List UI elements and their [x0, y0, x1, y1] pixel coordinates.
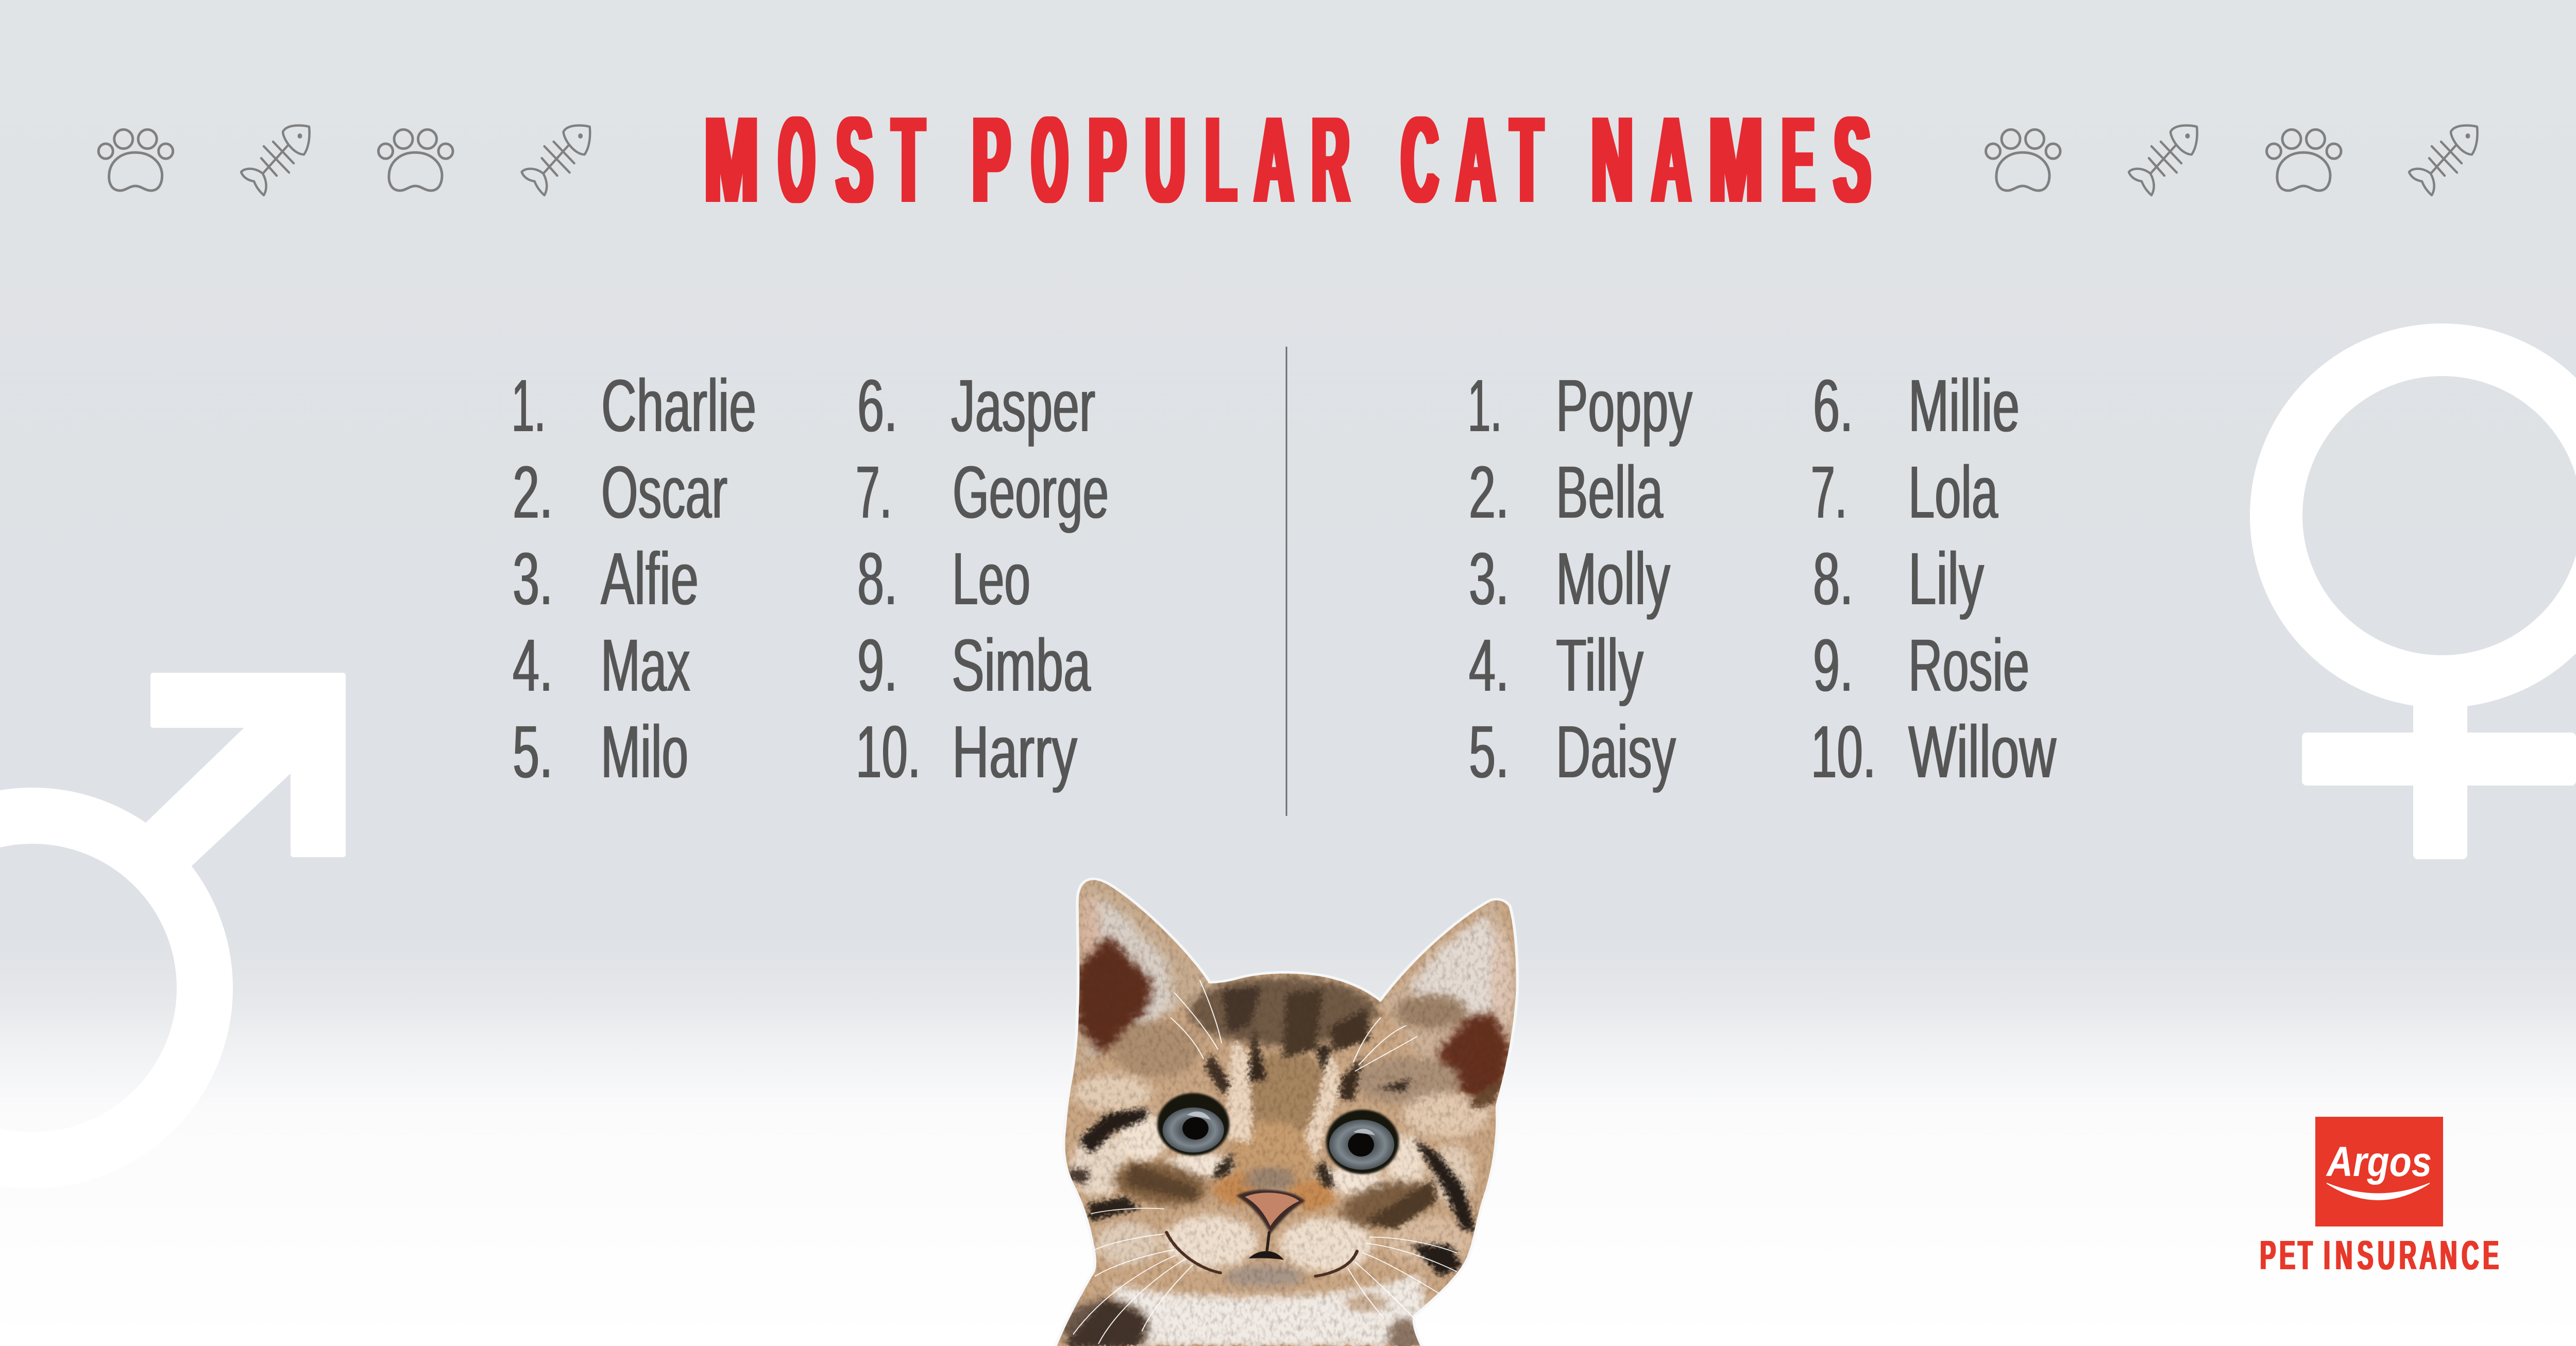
title: S	[837, 92, 873, 228]
girl names list: 1.	[1468, 364, 1502, 447]
title: O	[1032, 92, 1067, 228]
light forehead bars	[1225, 1043, 1252, 1143]
kitten fur and markings	[1057, 880, 1516, 1346]
title	[705, 92, 1870, 228]
boy names list: Oscar	[601, 451, 727, 534]
title: N	[1591, 92, 1633, 228]
girl names list	[1468, 364, 2057, 793]
girl names list: Poppy	[1556, 364, 1692, 447]
right ear dark patch	[1436, 1013, 1511, 1107]
title: A	[1457, 92, 1495, 228]
girl names list: Lola	[1908, 451, 1998, 534]
boy names list: 8.	[857, 537, 897, 620]
pet insurance label: PET INSURANCE	[2260, 1232, 2499, 1278]
left decorative icons: paws and fish bones	[98, 125, 590, 195]
title: L	[1206, 92, 1236, 228]
girl names list: Millie	[1908, 364, 2020, 447]
right eye	[1326, 1110, 1399, 1174]
boy names list: 10.	[856, 710, 921, 793]
tabby stripes	[1249, 1027, 1267, 1081]
boy names list: George	[953, 451, 1109, 534]
female gender symbol	[2276, 350, 2576, 859]
infographic canvas: S	[1834, 92, 1870, 228]
boy names list: 1.	[512, 364, 546, 447]
around eyes	[1116, 1112, 1167, 1162]
girl names list: Tilly	[1556, 624, 1643, 707]
boy names list: Simba	[952, 624, 1091, 707]
whiskers	[1073, 980, 1456, 1343]
divider line	[1286, 347, 1287, 816]
title: P	[1089, 92, 1126, 228]
girl names list: Lily	[1908, 537, 1984, 620]
logo red square	[2315, 1117, 2443, 1226]
chest	[1113, 1274, 1431, 1346]
forehead	[1189, 977, 1377, 1046]
girl names list: Daisy	[1556, 710, 1676, 793]
left ear	[1074, 880, 1213, 1067]
title: O	[779, 92, 814, 228]
title: A	[1255, 92, 1293, 228]
left ear dark patch	[1073, 935, 1153, 1055]
left eye	[1157, 1093, 1229, 1155]
girl names list: 9.	[1813, 624, 1853, 707]
boy names list: Charlie	[601, 364, 756, 447]
boy names list: Milo	[601, 710, 688, 793]
boy names list: 3.	[513, 537, 553, 620]
title: T	[1511, 92, 1543, 228]
boy names list: 6.	[857, 364, 897, 447]
boy names list: Leo	[952, 537, 1030, 620]
girl names list: Willow	[1908, 710, 2057, 793]
boy names list: 4.	[513, 624, 553, 707]
right decorative icons: paws and fish bones	[1986, 125, 2478, 195]
girl names list: Rosie	[1908, 624, 2029, 707]
girl names list: Molly	[1556, 537, 1670, 620]
Argos logo	[2315, 1117, 2443, 1226]
kitten illustration	[1054, 878, 1519, 1346]
muzzle	[1164, 1215, 1258, 1268]
boy names list: Harry	[952, 710, 1077, 793]
girl names list: 7.	[1811, 451, 1847, 534]
girl names list: Bella	[1556, 451, 1664, 534]
girl names list: 4.	[1469, 624, 1509, 707]
girl names list: 3.	[1469, 537, 1509, 620]
kitten halo outline	[1057, 880, 1516, 1346]
male gender symbol	[0, 675, 343, 1160]
mouth and smile	[1166, 1232, 1357, 1276]
boy names list: Jasper	[951, 364, 1095, 447]
fur grain	[1005, 855, 1571, 1346]
title: T	[893, 92, 924, 228]
boy names list: 2.	[513, 451, 553, 534]
cheeks	[1072, 1134, 1126, 1196]
girl names list: 5.	[1469, 710, 1509, 793]
title: A	[1652, 92, 1690, 228]
logo smile	[2327, 1183, 2430, 1200]
boy names list: 9.	[857, 624, 897, 707]
logo wordmark: Argos	[2326, 1138, 2432, 1185]
title: C	[1402, 92, 1438, 228]
girl names list: 2.	[1469, 451, 1509, 534]
boy names list: 5.	[513, 710, 553, 793]
title: M	[1709, 92, 1762, 228]
girl names list: 8.	[1813, 537, 1853, 620]
boy names list	[512, 364, 1109, 793]
title: M	[705, 92, 758, 228]
title: R	[1312, 92, 1349, 228]
boy names list: Alfie	[601, 537, 699, 620]
boy names list: Max	[601, 624, 690, 707]
right ear	[1381, 896, 1521, 1112]
title: P	[973, 92, 1010, 228]
boy names list: 7.	[856, 451, 892, 534]
nose	[1236, 1190, 1306, 1234]
girl names list: 6.	[1813, 364, 1853, 447]
girl names list: 10.	[1811, 710, 1876, 793]
title: E	[1782, 92, 1814, 228]
title: U	[1145, 92, 1185, 228]
